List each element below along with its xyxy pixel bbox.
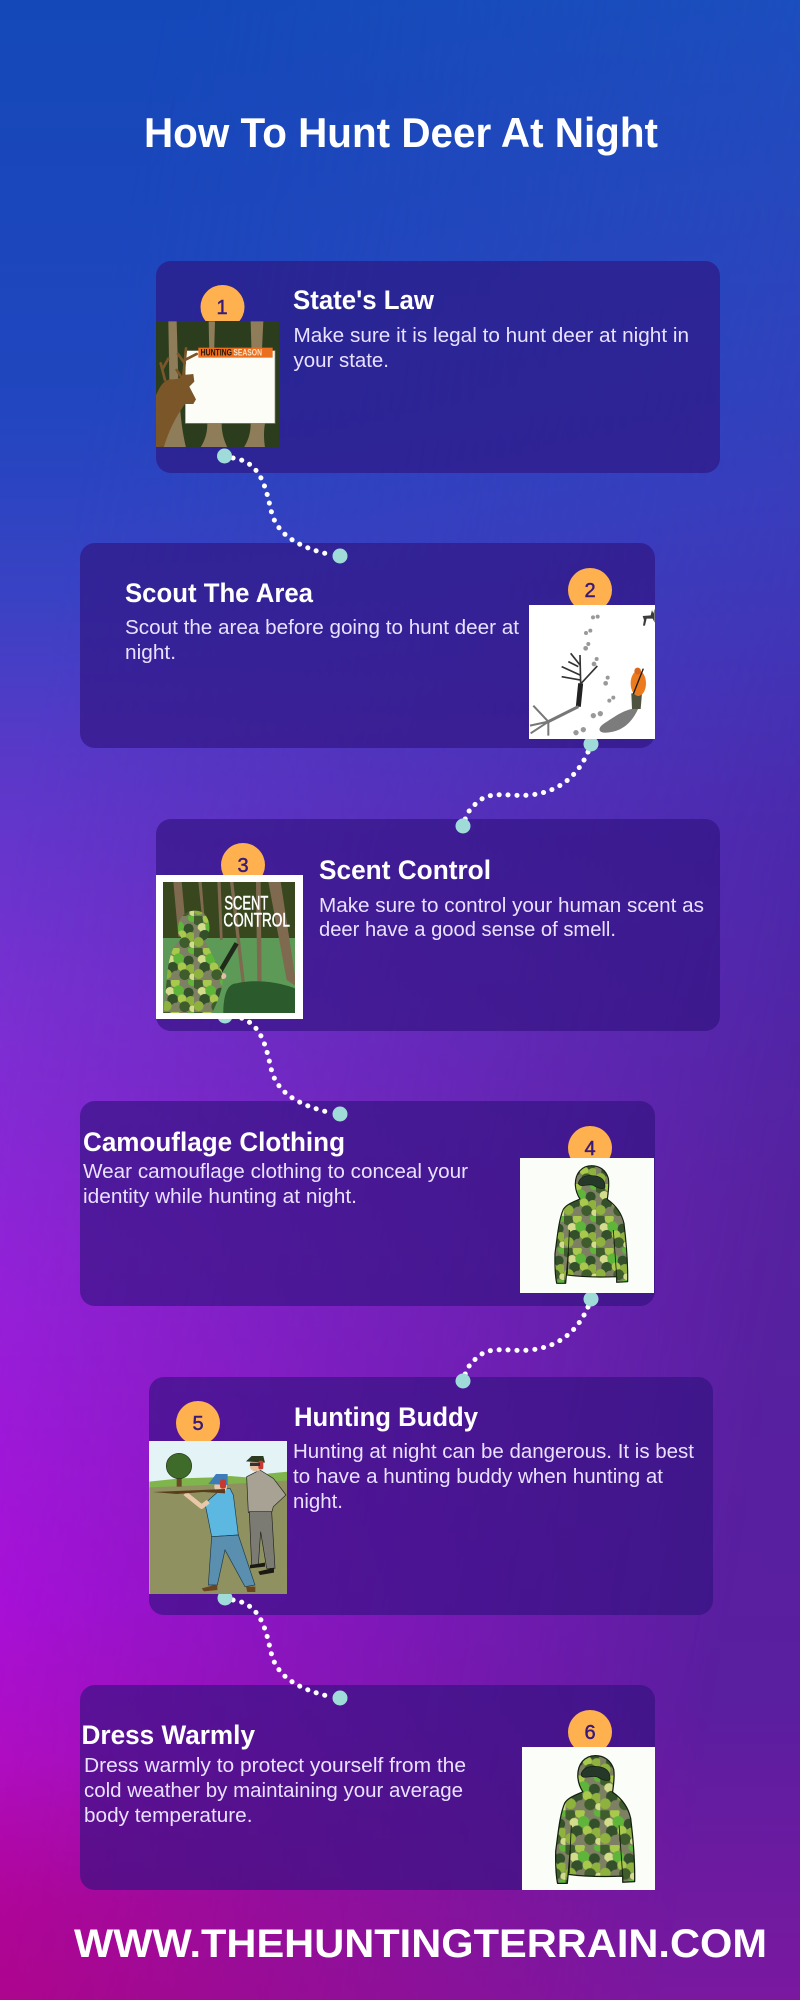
text block: camouflage clothing: Wear camouflage clothing to conceal your xyxy=(83,1161,468,1183)
text block: state's law xyxy=(294,325,689,372)
panel: step 3 scent control xyxy=(156,819,720,1031)
text block: camouflage clothing xyxy=(83,1161,468,1208)
icon: warm jacket picture xyxy=(522,1747,655,1890)
icon: hunting season deer picture: HUNTING xyxy=(201,348,232,358)
text block: dress warmly xyxy=(84,1755,466,1827)
text block: state's law: Make sure it is legal to hunt deer at night in xyxy=(294,325,689,347)
arrow: connector 1 to 2 xyxy=(217,448,348,564)
panel: step 1 state's law xyxy=(156,261,720,473)
badge: number 5 xyxy=(176,1401,220,1445)
icon: scent control picture: CONTROL xyxy=(223,911,290,932)
text block: scent control: Make sure to control your human scent as xyxy=(319,895,704,917)
icon: camouflage jacket picture xyxy=(520,1158,654,1293)
text block: scout the area: night. xyxy=(125,642,176,664)
text block: dress warmly: body temperature. xyxy=(84,1805,252,1827)
text block: scout the area: Scout the area before going to hunt deer at xyxy=(125,617,519,639)
text block: hunting buddy: night. xyxy=(293,1491,343,1513)
icon: scent control picture xyxy=(156,875,303,1019)
panel: step 6 dress warmly xyxy=(80,1685,655,1890)
text block: dress warmly: Dress warmly to protect yourself from the xyxy=(84,1755,466,1777)
title: How To Hunt Deer At Night xyxy=(144,109,658,156)
icon: hunting season deer picture: SEASON xyxy=(233,348,262,358)
badge: number 2 xyxy=(568,568,612,612)
badge: number 2: 2 xyxy=(584,580,596,602)
badge: number 3: 3 xyxy=(237,855,249,877)
arrow: connector 3 to 4 xyxy=(218,1008,348,1122)
heading: camouflage clothing: Camouflage Clothing xyxy=(83,1127,345,1157)
text block: state's law: your state. xyxy=(294,350,389,372)
text block: hunting buddy: to have a hunting buddy when hunting at xyxy=(293,1466,663,1488)
badge: number 1 xyxy=(200,285,244,329)
text block: dress warmly: cold weather by maintaining your average xyxy=(84,1780,463,1802)
panel: step 4 camouflage clothing xyxy=(80,1101,655,1306)
heading: hunting buddy: Hunting Buddy xyxy=(294,1402,478,1432)
arrow: connector 2 to 3 xyxy=(456,736,598,834)
heading: scout the area: Scout The Area xyxy=(125,578,314,608)
badge: number 4 xyxy=(568,1126,612,1170)
panel: step 5 hunting buddy xyxy=(149,1377,713,1615)
arrow: connector 5 to 6 xyxy=(218,1590,348,1706)
heading: state's law: State's Law xyxy=(293,285,435,315)
heading: scent control: Scent Control xyxy=(319,855,491,885)
text block: scent control: deer have a good sense of smell. xyxy=(319,919,616,941)
text block: hunting buddy xyxy=(293,1441,694,1513)
icon: hunter scouting snow tracks picture xyxy=(529,605,655,739)
badge: number 1: 1 xyxy=(216,297,228,319)
footer url: WWW.THEHUNTINGTERRAIN.COM xyxy=(74,1922,767,1966)
text block: scout the area xyxy=(125,617,519,664)
icon: scent control picture: SCENT xyxy=(224,893,268,914)
badge: number 4: 4 xyxy=(584,1138,596,1160)
badge: number 5: 5 xyxy=(192,1413,204,1435)
text block: camouflage clothing: identity while hunting at night. xyxy=(83,1186,357,1208)
heading: dress warmly: Dress Warmly xyxy=(82,1720,255,1750)
text block: scent control xyxy=(319,895,704,941)
text block: hunting buddy: Hunting at night can be dangerous. It is best xyxy=(293,1441,694,1463)
icon: two hunters picture xyxy=(149,1441,287,1594)
panel: step 2 scout the area xyxy=(80,543,655,748)
badge: number 6 xyxy=(568,1710,612,1754)
icon: hunting season deer picture xyxy=(156,321,279,447)
arrow: connector 4 to 5 xyxy=(456,1292,598,1388)
badge: number 6: 6 xyxy=(584,1722,596,1744)
badge: number 3 xyxy=(221,843,265,887)
